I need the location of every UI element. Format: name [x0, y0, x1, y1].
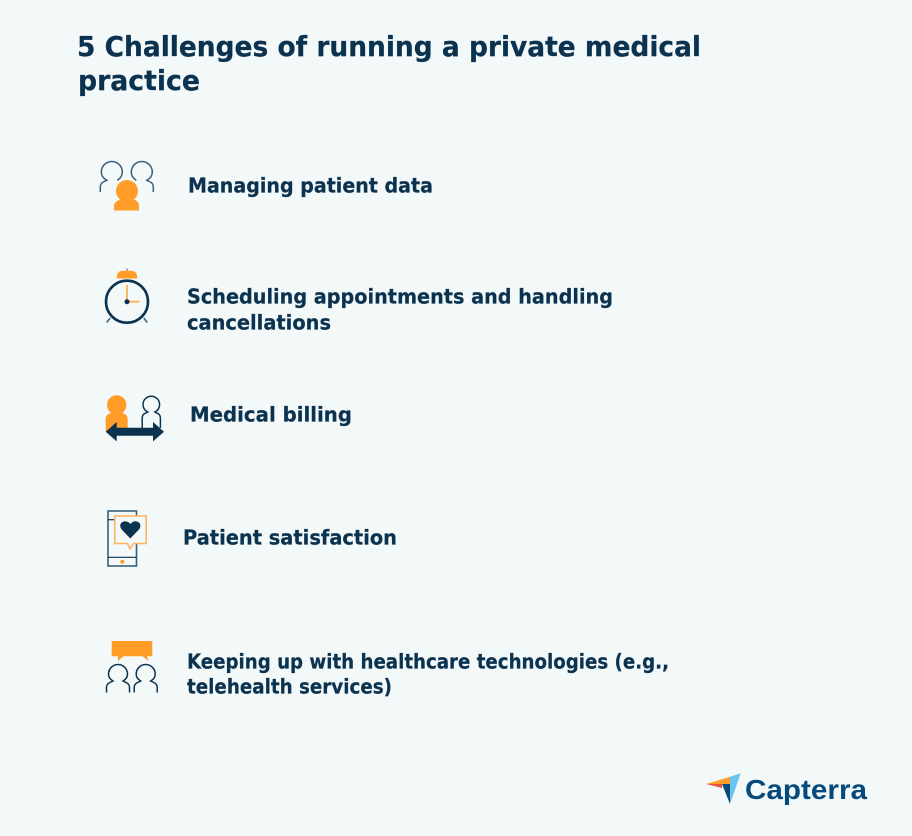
label: Managing patient data — [188, 174, 433, 198]
icon: alarm clock — [106, 268, 148, 323]
logo: Capterra — [706, 773, 867, 805]
item 2: scheduling — [106, 268, 613, 334]
label: Medical billing — [190, 402, 352, 426]
icon: phone with heart bubble — [108, 511, 146, 566]
label: telehealth services) — [187, 674, 392, 698]
label: Keeping up with healthcare technologies (e.g., — [187, 650, 669, 674]
item 1: managing patient data — [100, 162, 433, 210]
icon: three people — [100, 162, 153, 210]
title — [77, 31, 701, 97]
label — [187, 284, 613, 334]
label: Patient satisfaction — [183, 526, 397, 550]
icon: two people with arrow — [106, 395, 164, 441]
label: cancellations — [187, 310, 331, 334]
icon: Capterra arrow — [706, 773, 741, 804]
title: 5 Challenges of running a private medical — [77, 31, 701, 63]
item 3: medical billing — [106, 395, 352, 441]
item 5: healthcare technologies — [106, 641, 669, 698]
item 4: patient satisfaction — [108, 511, 397, 566]
icon: two people with speech bubble — [106, 641, 157, 692]
title: practice — [78, 65, 200, 97]
label — [187, 650, 669, 698]
wordmark: Capterra — [745, 774, 867, 805]
label: Scheduling appointments and handling — [187, 284, 613, 308]
